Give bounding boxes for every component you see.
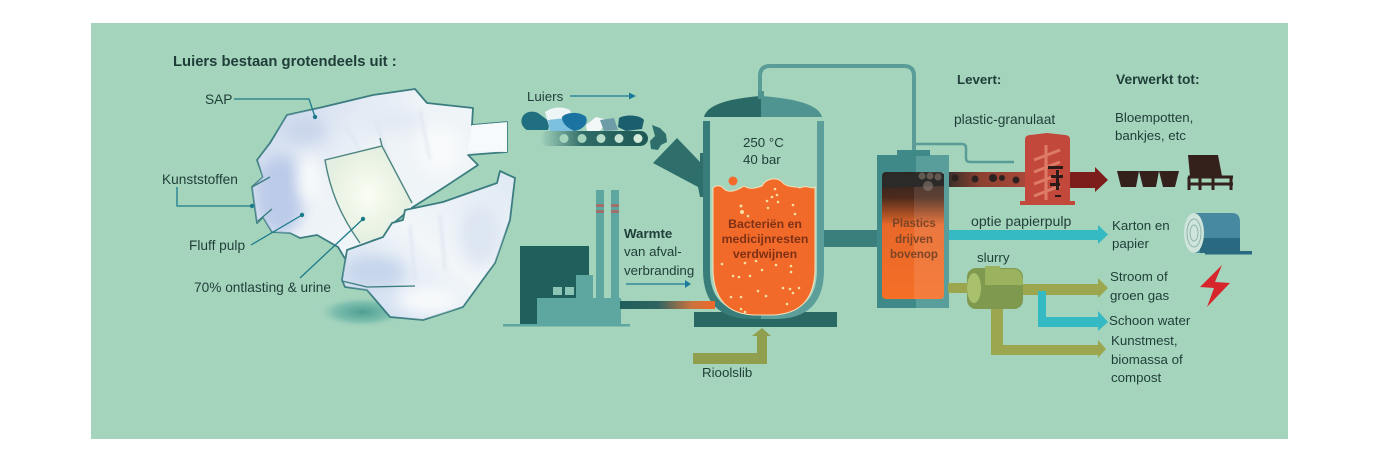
reactor conditions: 40 bar [743,152,781,167]
reactor vessel [703,91,824,319]
hopper chute [653,138,707,197]
background panel [91,23,1288,439]
heading: diaper composition: Luiers bestaan grotendeels uit : [173,54,397,70]
label: Karton en papier: papier [1112,236,1150,251]
reactor label [722,217,808,261]
label: optie papierpulp: optie papierpulp [971,213,1071,229]
label: Kunststoffen [162,172,254,208]
reactor orange liquid [713,176,815,315]
label: Karton en papier [1112,218,1170,251]
label: Kunstmest: compost [1111,370,1162,385]
label: Luiers with arrow [527,89,636,104]
label: SAP [205,92,317,119]
separator tank: drijven [895,234,933,246]
label: slurry: slurry [977,250,1010,265]
reactor label: Bacteriën en [728,217,802,231]
separator tank: bovenop [890,249,938,261]
slurry tank [967,266,1023,309]
label: Kunstmest: biomassa of [1111,352,1183,367]
reactor label: verdwijnen [733,247,797,261]
reactor conditions [743,135,784,167]
heat text [624,226,694,278]
icon: paper roll [1184,213,1252,254]
label: Stroom of groen gas [1110,269,1169,303]
label: Schoon water: Schoon water [1109,313,1191,328]
separator tank [877,150,949,308]
label: plastic-granulaat: plastic-granulaat [954,112,1055,127]
label: SAP: SAP [205,92,232,107]
plastic output pipe and arrow [949,167,1108,192]
conveyor belt with diapers [521,108,667,150]
label: 70% ontlasting & urine: 70% ontlasting & urine [194,280,331,295]
extruder [1020,133,1075,205]
label: 70% ontlasting & urine [194,217,365,295]
diaper illustration [252,89,515,328]
icon: flower pots [1117,171,1179,187]
label: Stroom of groen gas: Stroom of [1110,269,1168,284]
heat pipe [620,301,715,309]
sewage sludge arrow: Rioolslib [702,365,752,380]
label: Kunststoffen: Kunststoffen [162,172,238,187]
sewage sludge arrow [693,328,771,380]
headings: Levert and Verwerkt tot: Levert: [957,72,1001,87]
slurry pipes [948,278,1108,358]
separator tank: Plastics [892,218,936,230]
label: Fluff pulp [189,213,304,253]
label: Stroom of groen gas: groen gas [1110,288,1169,303]
label: Bloempotten: bankjes, etc [1115,128,1186,143]
incinerator plant [503,190,630,326]
paper pulp arrow [949,225,1108,244]
connecting pipe from reactor top [760,66,914,150]
pipe between reactor and separator [824,230,878,247]
label: Karton en papier: Karton en [1112,218,1170,233]
icon: lightning [1200,265,1230,307]
label: Bloempotten [1115,110,1193,143]
reactor base [694,312,837,327]
heat text: Warmte [624,226,672,241]
icon: bench [1188,155,1233,190]
heat arrow [626,280,691,288]
reactor label: medicijnresten [722,232,808,246]
heat text: verbranding [624,263,694,278]
headings: Levert and Verwerkt tot [957,72,1200,87]
label: Luiers with arrow: Luiers [527,89,564,104]
headings: Levert and Verwerkt tot: Verwerkt tot: [1116,72,1200,87]
heat text: van afval- [624,244,682,259]
label: Kunstmest [1111,333,1183,385]
label: Fluff pulp: Fluff pulp [189,238,245,253]
reactor conditions: 250 °C [743,135,784,150]
thin pipe from separator to extruder [915,144,1014,162]
label: Kunstmest: Kunstmest, [1111,333,1178,348]
label: Bloempotten: Bloempotten, [1115,110,1193,125]
